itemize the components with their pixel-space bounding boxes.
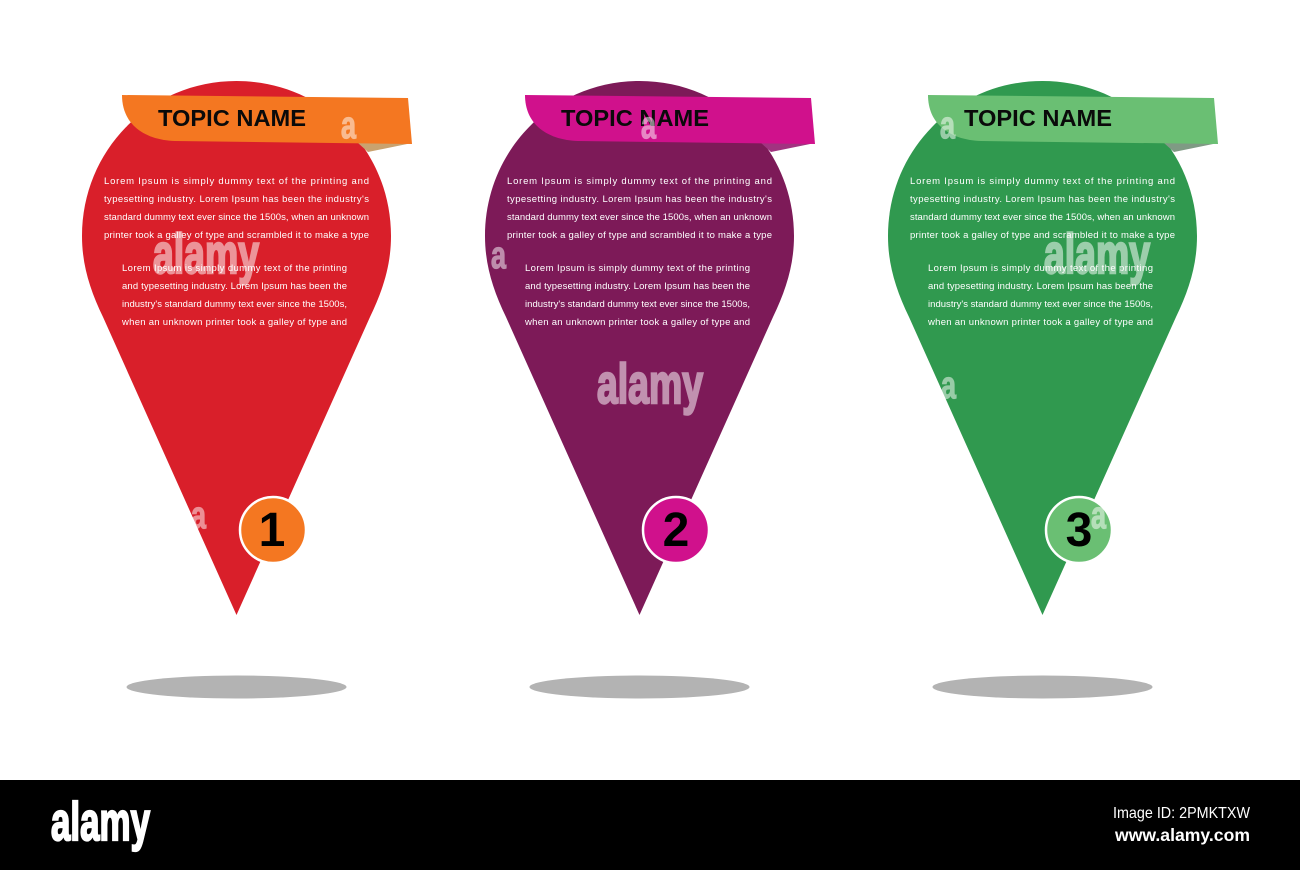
- text block 2b: industry's standard dummy text ever since the 1500s,: [525, 299, 750, 310]
- text block 1a: standard dummy text ever since the 1500s, when an unknown: [104, 212, 369, 223]
- pin body 2: [485, 81, 794, 615]
- footer bar: [0, 780, 1300, 870]
- watermarks: a: [641, 105, 657, 147]
- number badge 1: [240, 497, 306, 563]
- website: www.alamy.com: [1114, 825, 1250, 845]
- number badge 2: 2: [663, 504, 689, 557]
- ribbon 2: [525, 95, 815, 144]
- panel: topic 2: [485, 81, 815, 698]
- pin body 1: [82, 81, 391, 615]
- watermarks: alamy: [1044, 222, 1150, 285]
- text block 2a: typesetting industry. Lorem Ipsum has been the industry's: [507, 194, 772, 205]
- number badge 1: 1: [259, 504, 285, 557]
- text block 2b: when an unknown printer took a galley of type and: [524, 317, 750, 328]
- text block 1a: Lorem Ipsum is simply dummy text of the printing and: [104, 176, 369, 187]
- watermarks: alamy: [153, 222, 259, 285]
- ribbon fold 1: [358, 143, 412, 152]
- text block 1a: [104, 176, 369, 241]
- watermarks: a: [191, 495, 207, 537]
- text block 1b: Lorem Ipsum is simply dummy text of the printing: [122, 263, 347, 274]
- text block 1a: printer took a galley of type and scrambled it to make a type: [104, 230, 369, 241]
- text block 2a: [507, 176, 772, 241]
- ribbon 3: [928, 95, 1218, 144]
- watermarks: a: [341, 105, 357, 147]
- watermarks: a: [940, 105, 956, 147]
- text block 3a: printer took a galley of type and scrambled it to make a type: [910, 230, 1175, 241]
- ribbon 1: [122, 95, 412, 144]
- ribbon fold 3: [1164, 143, 1218, 152]
- ground shadow 2: [530, 676, 750, 698]
- text block 2b: [524, 263, 750, 328]
- ground shadow 3: [932, 676, 1152, 698]
- heading 1: TOPIC NAME: [158, 105, 306, 131]
- text block 1b: [121, 263, 347, 328]
- heading 3: TOPIC NAME: [964, 105, 1112, 131]
- text block 2a: printer took a galley of type and scrambled it to make a type: [507, 230, 772, 241]
- heading 2: TOPIC NAME: [561, 105, 709, 131]
- watermarks: [153, 105, 1150, 537]
- text block 2a: Lorem Ipsum is simply dummy text of the printing and: [507, 176, 772, 187]
- text block 1b: and typesetting industry. Lorem Ipsum has been the: [122, 281, 347, 292]
- text block 3b: and typesetting industry. Lorem Ipsum has been the: [928, 281, 1153, 292]
- panel: topic 1: [82, 81, 412, 698]
- text block 3b: Lorem Ipsum is simply dummy text of the printing: [928, 263, 1153, 274]
- image id: Image ID: 2PMKTXW: [1113, 805, 1251, 822]
- watermarks: a: [1091, 495, 1107, 537]
- ribbon fold 2: [761, 143, 815, 152]
- text block 3a: Lorem Ipsum is simply dummy text of the printing and: [910, 176, 1175, 187]
- ground shadow 1: [126, 676, 346, 698]
- text block 3a: typesetting industry. Lorem Ipsum has been the industry's: [910, 194, 1175, 205]
- text block 3b: when an unknown printer took a galley of type and: [927, 317, 1153, 328]
- watermarks: a: [941, 365, 957, 407]
- panel: topic 3: [888, 81, 1218, 698]
- number badge 3: [1046, 497, 1112, 563]
- text block 1a: typesetting industry. Lorem Ipsum has been the industry's: [104, 194, 369, 205]
- text block 3b: [927, 263, 1153, 328]
- text block 2b: Lorem Ipsum is simply dummy text of the printing: [525, 263, 750, 274]
- text block 1b: industry's standard dummy text ever since the 1500s,: [122, 299, 347, 310]
- number badge 2: [643, 497, 709, 563]
- text block 3a: [910, 176, 1175, 241]
- watermarks: a: [491, 235, 507, 277]
- footer logo: alamy: [51, 792, 150, 852]
- text block 3a: standard dummy text ever since the 1500s, when an unknown: [910, 212, 1175, 223]
- text block 1b: when an unknown printer took a galley of type and: [121, 317, 347, 328]
- watermarks: alamy: [597, 352, 703, 415]
- text block 3b: industry's standard dummy text ever since the 1500s,: [928, 299, 1153, 310]
- number badge 3: 3: [1066, 504, 1092, 557]
- text block 2b: and typesetting industry. Lorem Ipsum has been the: [525, 281, 750, 292]
- text block 2a: standard dummy text ever since the 1500s, when an unknown: [507, 212, 772, 223]
- pin body 3: [888, 81, 1197, 615]
